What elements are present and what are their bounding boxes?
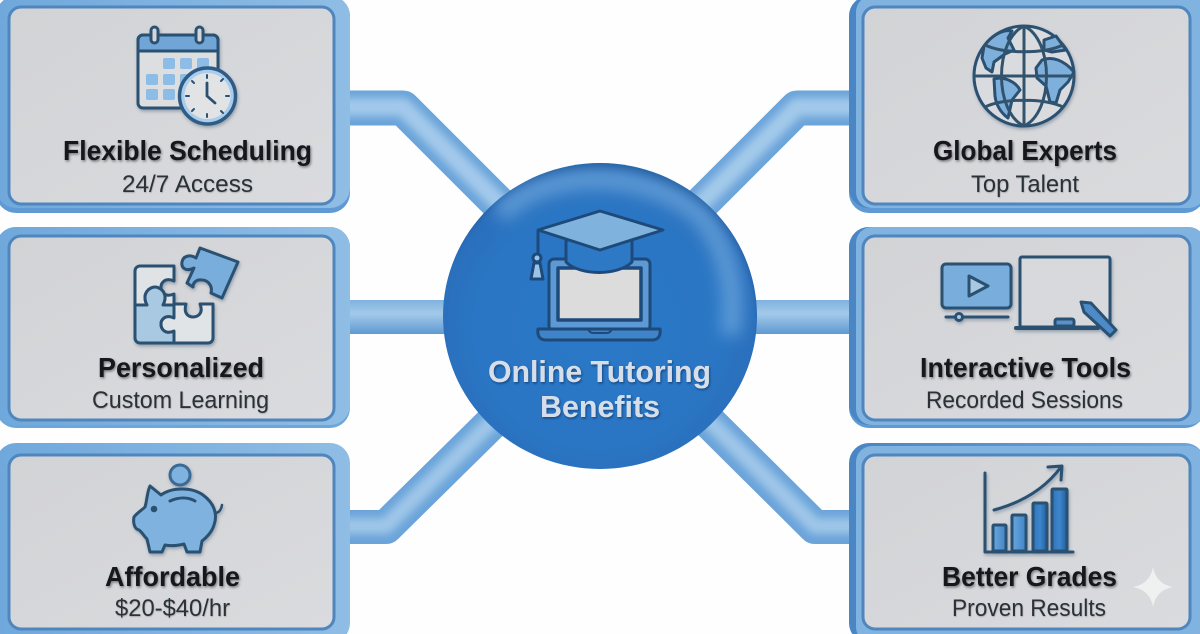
text: price range: $20-$40/hr <box>115 595 230 622</box>
icon: sparkle watermark <box>1133 567 1173 607</box>
panel: personalized <box>0 227 350 428</box>
icon: bar chart with arrow <box>985 466 1073 552</box>
text: proven results: Proven Results <box>952 595 1106 622</box>
panel: better grades <box>849 443 1200 634</box>
connectors <box>342 107 858 527</box>
icon: puzzle <box>135 248 238 343</box>
text: custom learning: Custom Learning <box>92 387 269 414</box>
connector: better grades <box>672 384 858 527</box>
connector: personalized <box>342 300 452 334</box>
text: top talent: Top Talent <box>971 171 1079 198</box>
panel: global experts <box>849 0 1200 213</box>
icon: calendar and clock <box>138 27 236 124</box>
connector: affordable <box>342 384 530 527</box>
heading: online tutoring benefits <box>488 354 711 424</box>
heading: personalized: Personalized <box>98 352 264 383</box>
heading: online tutoring benefits: Benefits <box>540 389 660 424</box>
heading: affordable: Affordable <box>105 561 240 592</box>
connector: flexible scheduling <box>342 107 535 240</box>
heading: flexible scheduling: Flexible Scheduling <box>63 135 312 166</box>
text: recorded sessions: Recorded Sessions <box>926 387 1123 414</box>
heading: better grades: Better Grades <box>942 561 1117 592</box>
icon: globe <box>974 26 1074 126</box>
panel: flexible scheduling <box>0 0 350 213</box>
panel: affordable <box>0 443 350 634</box>
connector: global experts <box>665 107 858 240</box>
heading: online tutoring benefits: Online Tutoring <box>488 354 711 389</box>
central hub sphere <box>443 163 757 469</box>
text: 24/7 access: 24/7 Access <box>122 171 253 198</box>
icon: graduation cap on laptop <box>531 211 663 340</box>
icon: video and whiteboard <box>942 257 1116 336</box>
connector: interactive tools <box>748 300 858 334</box>
icon: piggy bank <box>134 465 222 552</box>
panel: interactive tools <box>849 227 1200 428</box>
heading: global experts: Global Experts <box>933 135 1117 166</box>
heading: interactive tools: Interactive Tools <box>920 352 1131 383</box>
